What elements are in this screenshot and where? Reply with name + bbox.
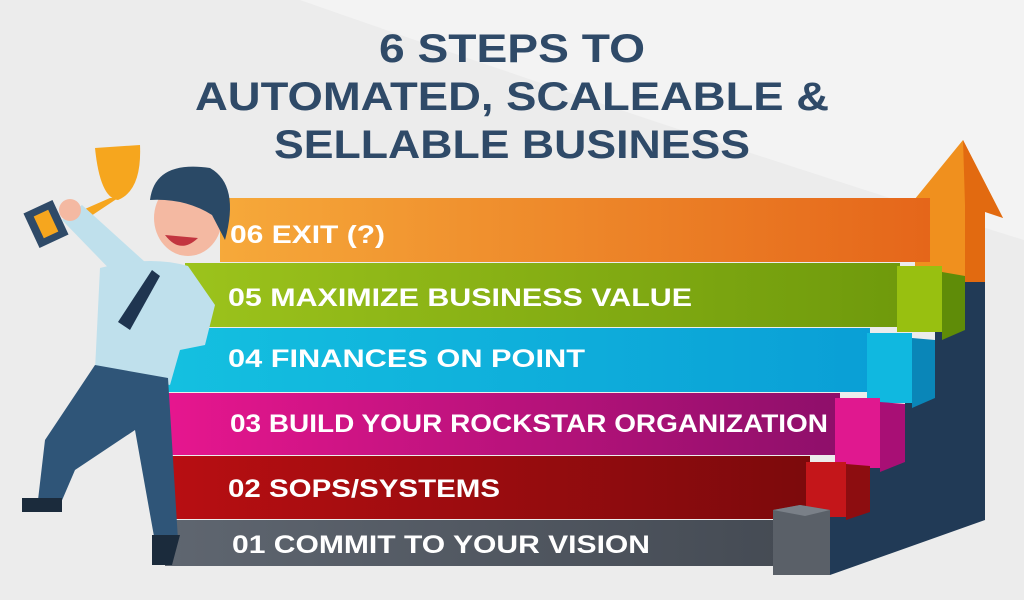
man with trophy [22, 145, 230, 565]
trophy [23, 145, 140, 248]
arm raised [62, 205, 145, 285]
step 02: 02 SOPS/SYSTEMS [228, 475, 500, 503]
tie [118, 270, 160, 330]
step 05 [185, 263, 965, 340]
step 02 [157, 456, 870, 520]
step 01 [165, 505, 830, 575]
title: 6 STEPS TO [379, 27, 645, 71]
head [154, 180, 222, 256]
step 06 [220, 198, 930, 262]
step 06: 06 EXIT (?) [230, 221, 385, 249]
belt and legs [38, 365, 178, 542]
step 05: 05 MAXIMIZE BUSINESS VALUE [228, 284, 692, 312]
step 04: 04 FINANCES ON POINT [228, 345, 585, 373]
step 03: 03 BUILD YOUR ROCKSTAR ORGANIZATION [230, 410, 828, 438]
title: SELLABLE BUSINESS [274, 123, 750, 167]
torso [95, 261, 215, 385]
title [195, 27, 829, 167]
step 03 [155, 393, 905, 472]
step 04 [168, 328, 935, 408]
step 01: 01 COMMIT TO YOUR VISION [232, 531, 650, 559]
staircase backdrop [830, 275, 985, 575]
arrow [910, 140, 1003, 282]
title: AUTOMATED, SCALEABLE & [195, 75, 829, 119]
hand [59, 199, 81, 221]
